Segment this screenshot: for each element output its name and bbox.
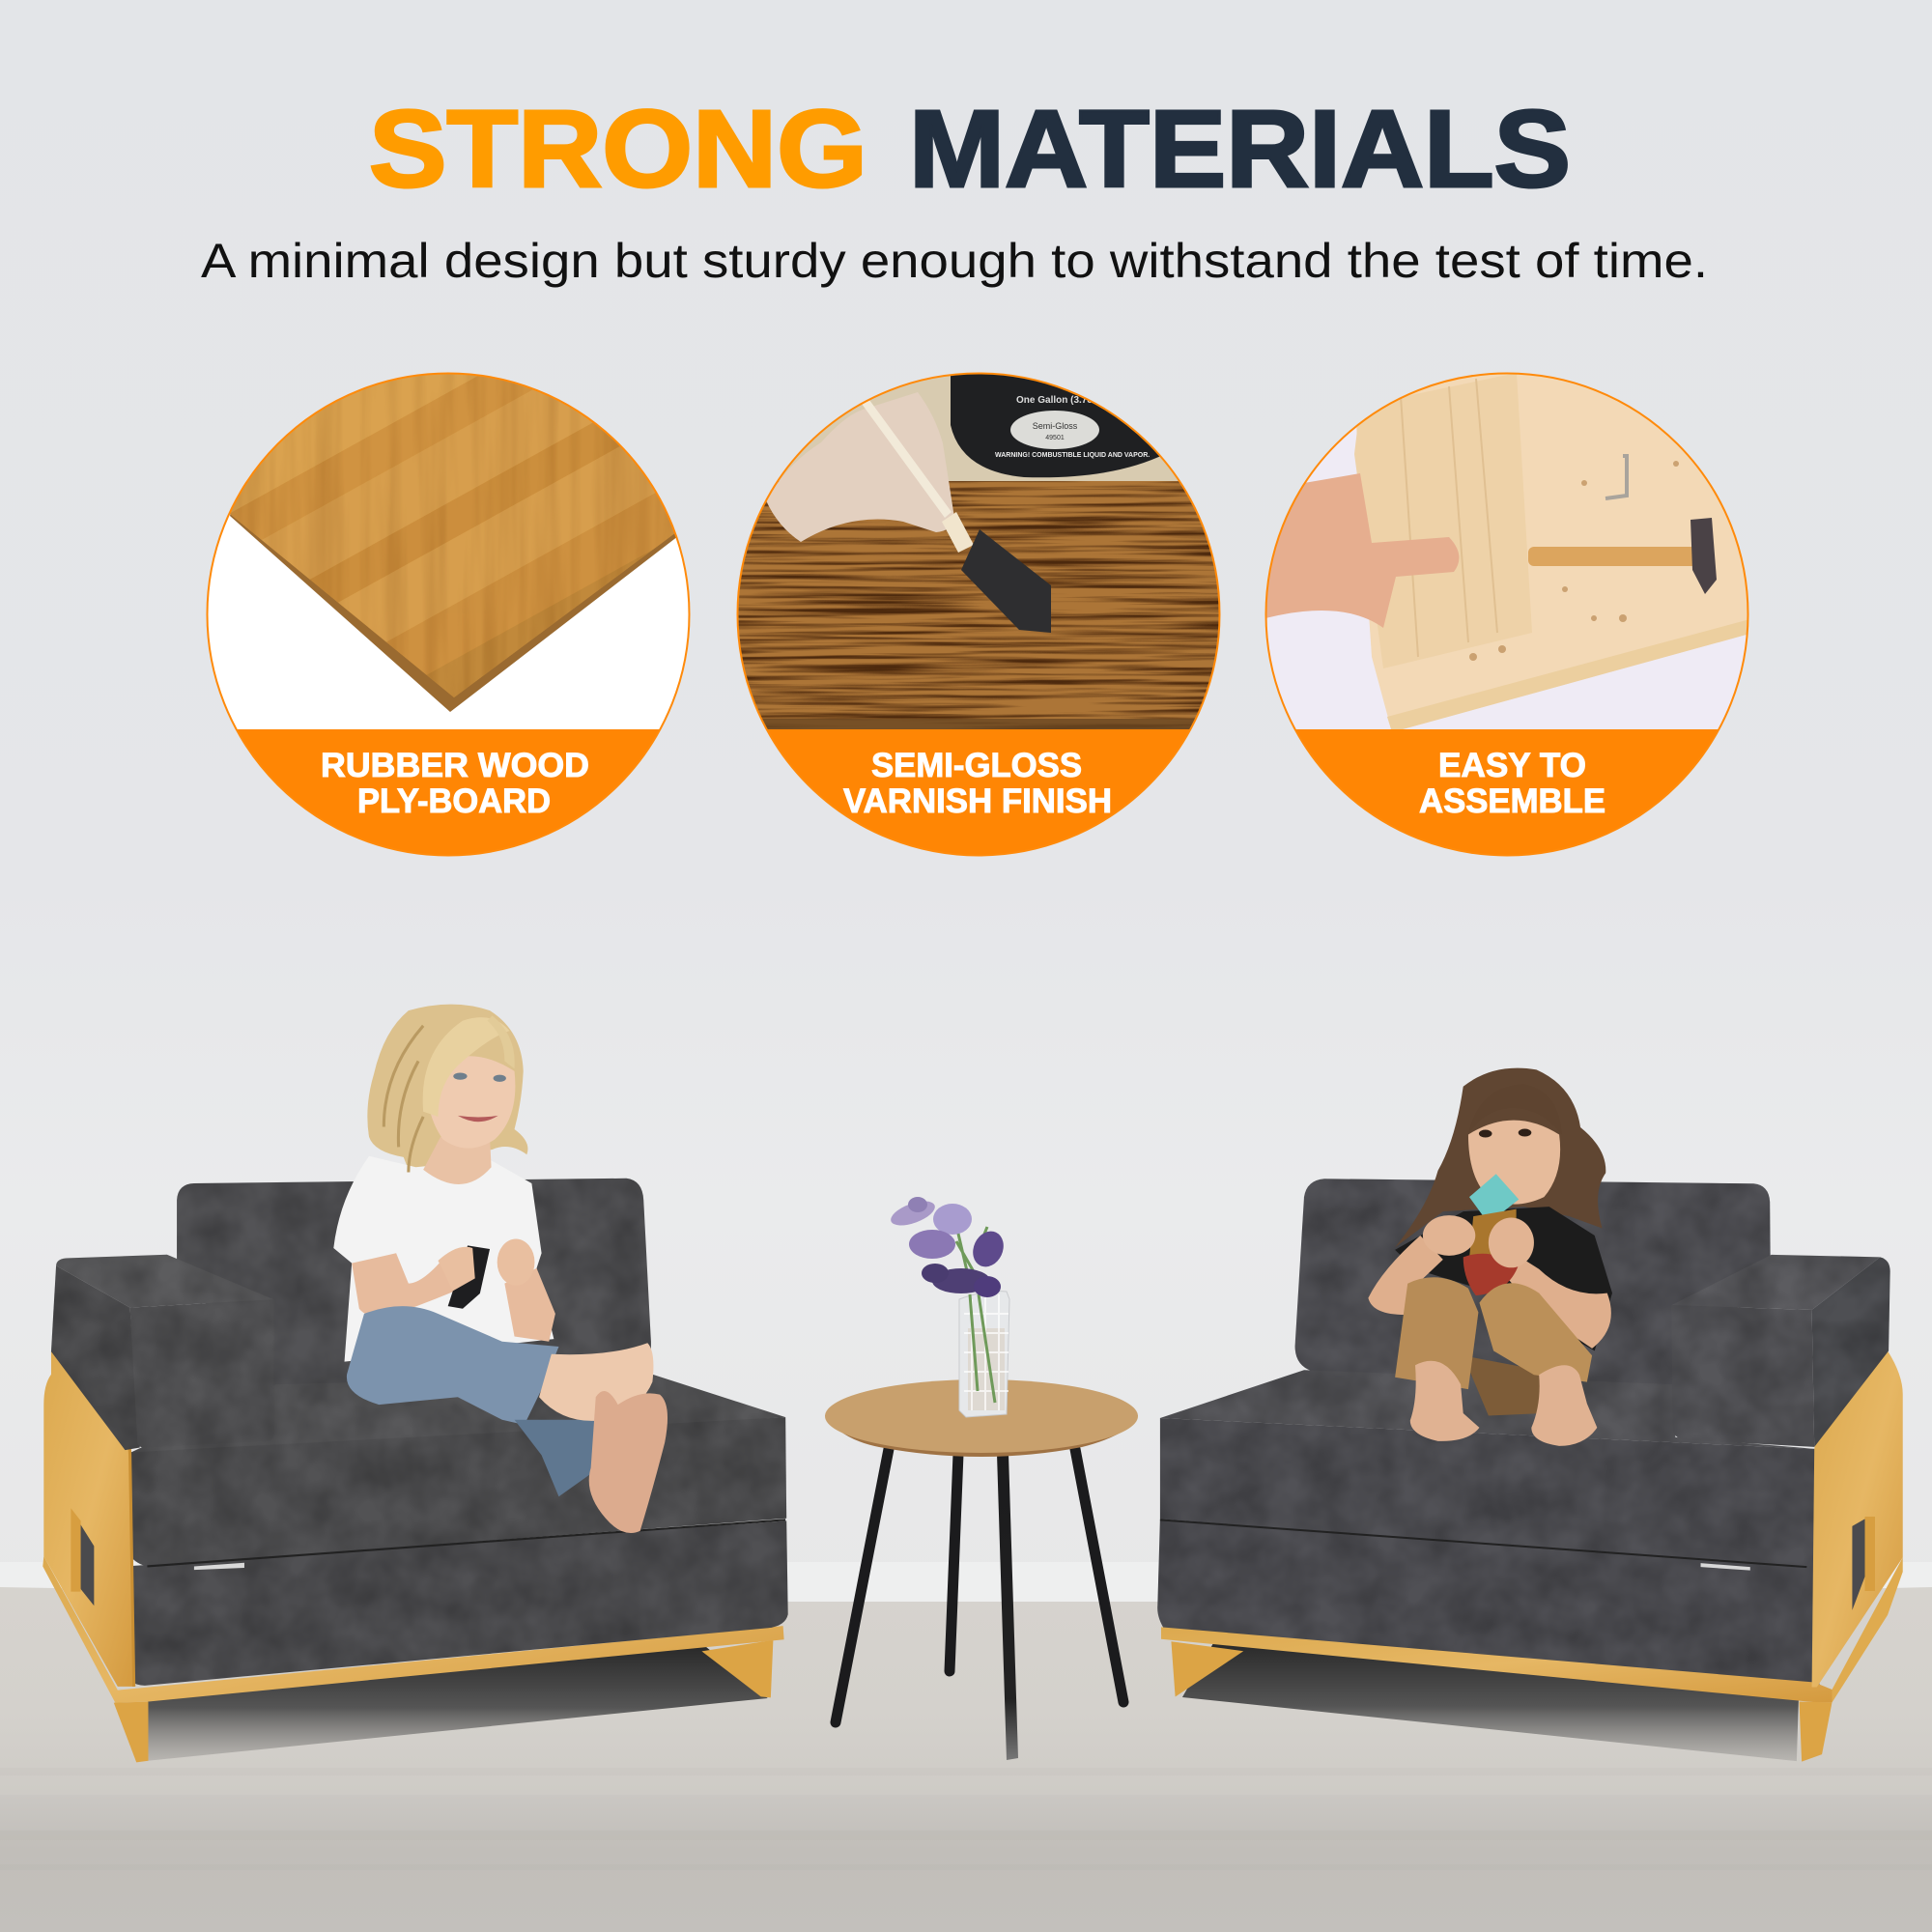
eyes and mouth	[453, 1072, 506, 1122]
caption text: EASY TO	[1438, 747, 1586, 784]
photo: varnish brush on wood: Semi-Gloss	[1033, 421, 1078, 431]
back cushion	[1295, 1179, 1771, 1389]
circle outline	[738, 373, 1219, 856]
fringe	[1468, 1084, 1562, 1135]
right arm	[504, 1268, 555, 1342]
caption text: RUBBER WOOD	[321, 747, 589, 784]
zipper tag	[1701, 1563, 1750, 1571]
circle outline	[1265, 373, 1748, 856]
title word: strong: STRONG	[369, 88, 867, 210]
side wood panel	[43, 1351, 134, 1687]
right sofa with child	[1157, 1068, 1903, 1762]
cushion seam	[147, 1520, 785, 1566]
title	[369, 88, 1571, 210]
crotch shadow	[1463, 1355, 1544, 1415]
seat cushion	[125, 1375, 786, 1566]
hair	[1395, 1068, 1605, 1247]
game controller	[448, 1245, 490, 1309]
khaki leg: left	[1395, 1277, 1478, 1389]
photo: varnish brush on wood: 49501	[1045, 435, 1065, 441]
foot: lower	[589, 1391, 668, 1533]
wooden frame base	[43, 1556, 784, 1762]
khaki leg: right	[1479, 1283, 1592, 1382]
foot: upper	[539, 1343, 653, 1421]
photo: varnish brush on wood: One Gallon (3.785 L)	[1016, 395, 1110, 406]
panel: semi-gloss varnish finish	[737, 367, 1220, 860]
baseboard	[0, 1562, 1932, 1603]
hair back	[367, 1005, 527, 1182]
subtitle: A minimal design but sturdy enough to withstand the test of time.	[201, 234, 1708, 288]
photo: wood board	[209, 375, 688, 729]
arm cushion	[1671, 1255, 1890, 1447]
floor	[0, 1587, 1932, 1932]
jeans	[347, 1306, 558, 1425]
left sofa with child	[43, 1005, 788, 1762]
hands	[438, 1239, 534, 1291]
table top	[825, 1379, 1138, 1457]
eyes	[1479, 1129, 1531, 1137]
face	[1468, 1121, 1560, 1205]
table legs	[836, 1449, 1123, 1760]
wooden frame base	[1161, 1557, 1903, 1762]
black shirt	[1395, 1207, 1612, 1350]
wooden back leg	[701, 1640, 773, 1697]
hair strands	[384, 1026, 423, 1173]
photo: assembling wooden boards	[1265, 367, 1753, 735]
right foot	[1531, 1365, 1597, 1446]
circle outline	[207, 373, 690, 856]
seat cushion	[1160, 1370, 1819, 1570]
child: blond boy	[333, 1005, 668, 1533]
caption text: SEMI-GLOSS	[871, 747, 1082, 784]
side wood panel	[1812, 1350, 1903, 1688]
arm cushion	[51, 1255, 274, 1450]
caption text	[843, 747, 1112, 820]
photo: varnish brush on wood: WARNING! COMBUSTIBLE LIQUID AND VAPOR.	[995, 452, 1150, 459]
hair fringe	[423, 1017, 509, 1117]
orange caption band	[1296, 729, 1718, 854]
caption text	[1419, 747, 1605, 820]
caption text: VARNISH FINISH	[843, 782, 1112, 820]
caption text: PLY-BOARD	[357, 782, 551, 820]
back cushion	[177, 1179, 651, 1389]
caption text: ASSEMBLE	[1419, 782, 1605, 820]
caption text	[321, 747, 589, 820]
left foot	[1410, 1361, 1479, 1441]
sippy bottle	[1463, 1174, 1519, 1295]
orange caption band	[238, 729, 659, 854]
wooden back leg	[1171, 1641, 1243, 1696]
left arm	[352, 1253, 472, 1317]
hands	[1423, 1215, 1534, 1267]
panel: rubber wood ply-board	[207, 373, 690, 856]
face	[427, 1056, 515, 1149]
side table	[825, 1196, 1138, 1760]
title word: materials: MATERIALS	[909, 88, 1571, 210]
orange caption band	[767, 729, 1190, 854]
floor shadow	[148, 1642, 768, 1761]
photo: varnish brush on wood	[737, 367, 1220, 732]
child: toddler drinking	[1368, 1068, 1612, 1446]
floor shadow	[1182, 1639, 1799, 1761]
vase with flowers	[888, 1196, 1009, 1417]
shirt	[333, 1156, 554, 1362]
arms	[1368, 1236, 1611, 1349]
lower cushion	[1157, 1519, 1819, 1688]
neck	[423, 1137, 492, 1184]
zipper tag	[194, 1563, 244, 1570]
cushion seam	[1160, 1520, 1806, 1567]
lower cushion	[125, 1520, 788, 1686]
panel: easy to assemble	[1265, 367, 1753, 860]
